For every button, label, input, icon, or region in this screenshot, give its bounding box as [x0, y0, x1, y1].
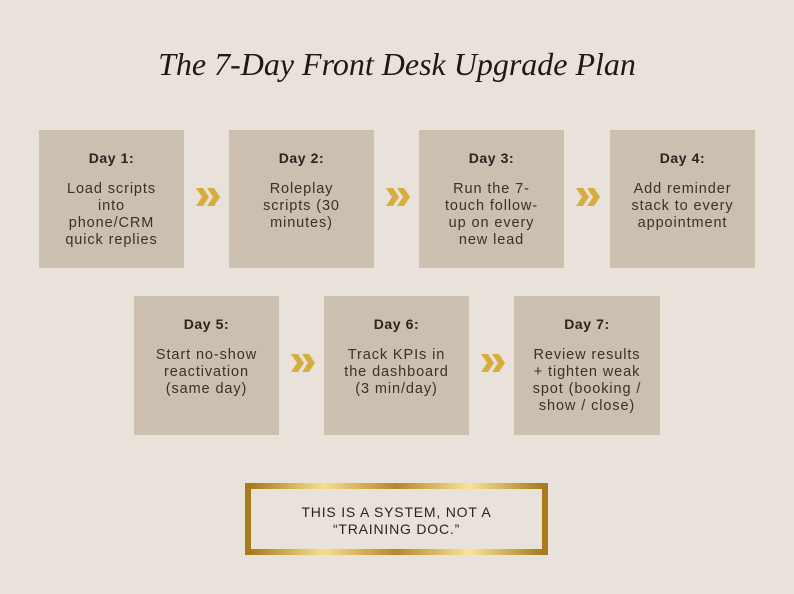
step: day 2	[229, 130, 374, 268]
step: day 1: Day 1:	[89, 150, 134, 166]
callout: gold frame: THIS IS A SYSTEM, NOT A	[301, 504, 492, 520]
step: day 7: Review results	[534, 347, 640, 363]
step: day 3	[419, 130, 564, 268]
step: day 5: (same day)	[166, 381, 247, 397]
arrow 3-4	[576, 188, 600, 206]
arrow 2-3	[386, 188, 410, 206]
step: day 3: up on every	[449, 215, 534, 231]
step: day 2: Roleplay	[270, 181, 333, 197]
step: day 1: phone/CRM	[69, 215, 154, 231]
step: day 7: spot (booking /	[533, 381, 641, 397]
step: day 7: + tighten weak	[534, 364, 640, 380]
step: day 4	[610, 130, 755, 268]
arrow 6-7	[481, 354, 505, 372]
step: day 3: new lead	[459, 232, 524, 248]
step: day 5: Start no-show	[156, 347, 257, 363]
step: day 7: Day 7:	[564, 316, 610, 332]
step: day 7: show / close)	[539, 398, 635, 414]
arrow 1-2	[196, 188, 220, 206]
step: day 3: touch follow-	[445, 198, 538, 214]
step: day 6: the dashboard	[344, 364, 449, 380]
step: day 7	[514, 296, 660, 435]
step: day 6: Day 6:	[374, 316, 419, 332]
step: day 1: into	[98, 198, 125, 214]
step: day 1	[39, 130, 184, 268]
step: day 2: minutes)	[270, 215, 333, 231]
callout: gold frame: “TRAINING DOC.”	[333, 521, 460, 537]
step: day 4: appointment	[638, 215, 727, 231]
callout: gold frame	[245, 483, 548, 555]
step: day 1: Load scripts	[67, 181, 156, 197]
step: day 3: Day 3:	[469, 150, 514, 166]
title: The 7-Day Front Desk Upgrade Plan	[158, 46, 636, 82]
step: day 1: quick replies	[65, 232, 158, 248]
arrow 5-6	[291, 354, 315, 372]
step: day 6: Track KPIs in	[348, 347, 445, 363]
step: day 4: stack to every	[631, 198, 734, 214]
step: day 6	[324, 296, 469, 435]
step: day 2: Day 2:	[279, 150, 324, 166]
step: day 5: reactivation	[164, 364, 249, 380]
step: day 4: Day 4:	[660, 150, 705, 166]
step: day 4: Add reminder	[634, 181, 731, 197]
step: day 3: Run the 7-	[453, 181, 530, 197]
step: day 5: Day 5:	[184, 316, 229, 332]
step: day 6: (3 min/day)	[355, 381, 438, 397]
step: day 2: scripts (30	[263, 198, 340, 214]
step: day 5	[134, 296, 279, 435]
